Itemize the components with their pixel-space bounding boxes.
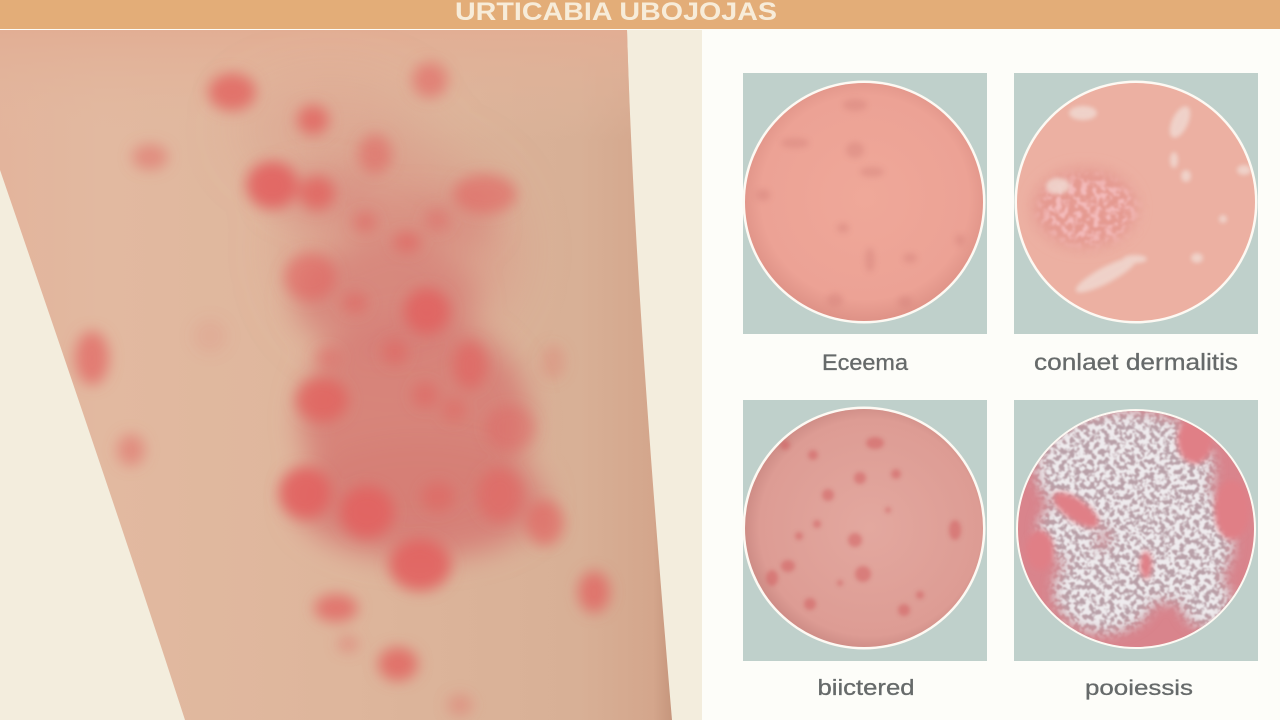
eczema skin texture: [740, 80, 990, 325]
panel: contact dermatitis: [1010, 73, 1260, 334]
panel: blistered: [740, 400, 990, 661]
exposed red plaques: [1026, 416, 1250, 579]
label: contact dermatitis: conlaet dermalitis: [1034, 349, 1238, 375]
diffuse redness: [265, 96, 514, 315]
title banner: [0, 0, 1280, 29]
left cream background: [0, 30, 702, 720]
wheals: [75, 62, 610, 716]
label: eczema: Eceema: [822, 350, 909, 375]
label: psoriasis: pooiessis: [1085, 677, 1193, 700]
panel: eczema: [740, 73, 990, 334]
contact dermatitis skin texture: [1010, 80, 1260, 325]
blistered skin texture: [740, 405, 990, 650]
psoriasis skin texture: [1018, 411, 1254, 647]
scale flakes: [1037, 412, 1232, 632]
forearm illustration with urticaria wheals: [0, 30, 680, 720]
label: blistered: biictered: [818, 675, 914, 700]
panel: psoriasis: [1010, 400, 1260, 661]
